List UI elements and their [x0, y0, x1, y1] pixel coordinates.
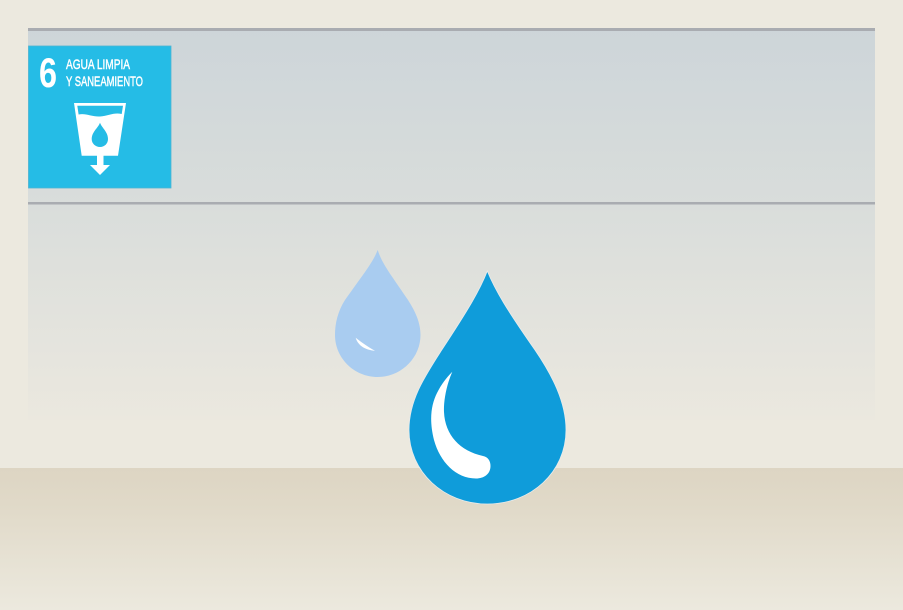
- floor band: [0, 468, 903, 610]
- background wall: [0, 0, 903, 468]
- SDG 6 tile: [28, 46, 171, 188]
- goal number: 6: [39, 49, 57, 96]
- goal title: AGUA LIMPIA: [66, 56, 130, 72]
- large drop highlight: [431, 372, 490, 478]
- icon: small light water drop: [335, 250, 420, 377]
- icon: large blue water drop: [409, 271, 566, 504]
- small drop highlight: [356, 338, 375, 351]
- window panel: [28, 28, 875, 420]
- goal title: [66, 56, 143, 89]
- icon: glass with water drop and arrow: [74, 103, 126, 175]
- goal title: Y SANEAMIENTO: [66, 73, 143, 89]
